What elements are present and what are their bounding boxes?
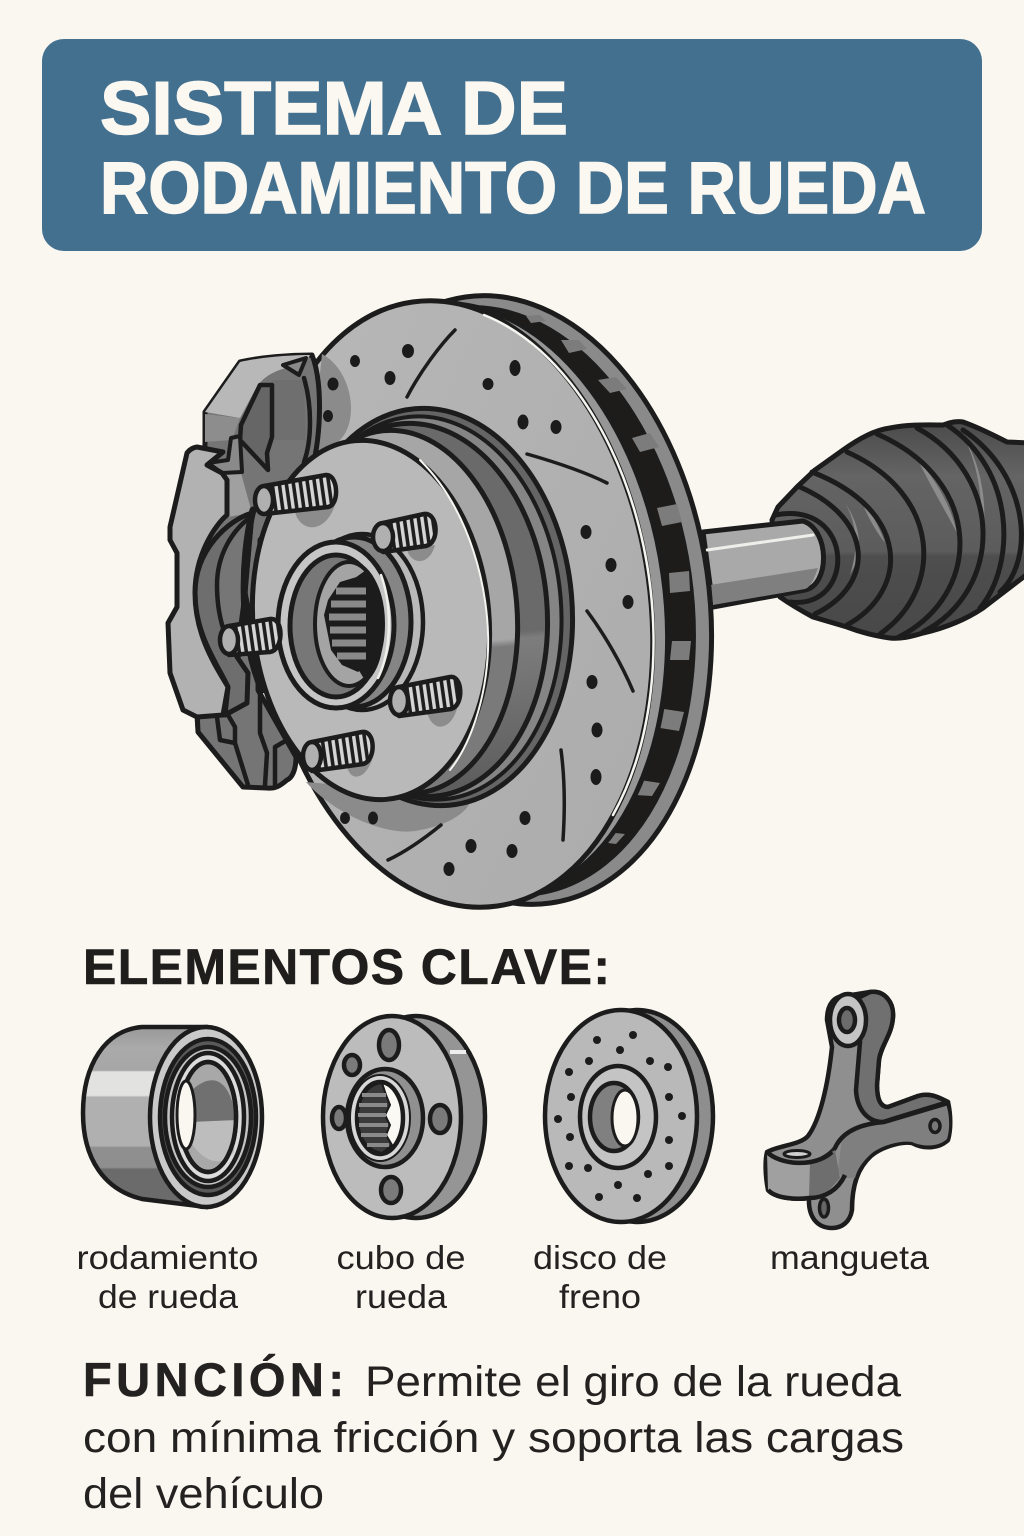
- function description: del vehículo: [83, 1470, 324, 1518]
- caliper front pad: [168, 447, 228, 717]
- component: wheel bearing: [83, 1027, 262, 1207]
- brake disc perforations: [554, 1031, 686, 1202]
- title: SISTEMA DE: [100, 66, 568, 150]
- caliper inner crescents: [195, 513, 255, 715]
- title: RODAMIENTO DE RUEDA: [100, 148, 926, 229]
- hub flange face: [238, 430, 504, 810]
- label: disco de freno: freno: [559, 1278, 641, 1315]
- label: rodamiento de rueda: rodamiento: [76, 1239, 258, 1276]
- component: steering knuckle: [766, 992, 950, 1228]
- disc vent slots: [526, 315, 691, 844]
- boot highlights: [845, 436, 984, 575]
- label: cubo de rueda: rueda: [355, 1278, 448, 1315]
- label: rodamiento de rueda: de rueda: [98, 1278, 239, 1315]
- caliper pocket: [240, 385, 272, 470]
- function description: con mínima fricción y soporta las cargas: [83, 1414, 904, 1462]
- title: [100, 66, 926, 229]
- function description: FUNCIÓN:: [83, 1353, 344, 1406]
- label: rodamiento de rueda: [76, 1239, 258, 1315]
- disc slots: [388, 330, 633, 860]
- drive shaft: [703, 521, 824, 607]
- main illustration: brake and hub assembly: [168, 269, 1024, 933]
- function description: Permite el giro de la rueda: [365, 1358, 901, 1406]
- function description: [83, 1353, 904, 1518]
- boot ribs: [775, 425, 1021, 638]
- caliper bridge: [222, 473, 252, 517]
- title banner: [42, 39, 982, 251]
- label: disco de freno: disco de: [533, 1239, 667, 1276]
- disc drilled holes: [323, 344, 634, 876]
- wheel studs: [220, 475, 460, 771]
- heading: elementos clave: ELEMENTOS CLAVE:: [83, 939, 610, 995]
- caliper: [168, 355, 320, 788]
- hub bell housing: [268, 397, 589, 817]
- brake disc body: [219, 269, 750, 933]
- label: cubo de rueda: [336, 1239, 466, 1315]
- shadows on disc: [310, 354, 351, 470]
- label: cubo de rueda: cubo de: [336, 1239, 466, 1276]
- caliper rear body: [197, 355, 320, 788]
- label: disco de freno: [533, 1239, 667, 1315]
- centre ring and splined bore: [278, 534, 423, 710]
- CV boot: [772, 422, 1024, 638]
- stud shadows: [295, 505, 458, 777]
- disc friction face: [219, 275, 691, 933]
- component: wheel hub: [323, 1016, 485, 1218]
- label: mangueta: mangueta: [770, 1239, 930, 1276]
- component: brake disc: [545, 1010, 713, 1222]
